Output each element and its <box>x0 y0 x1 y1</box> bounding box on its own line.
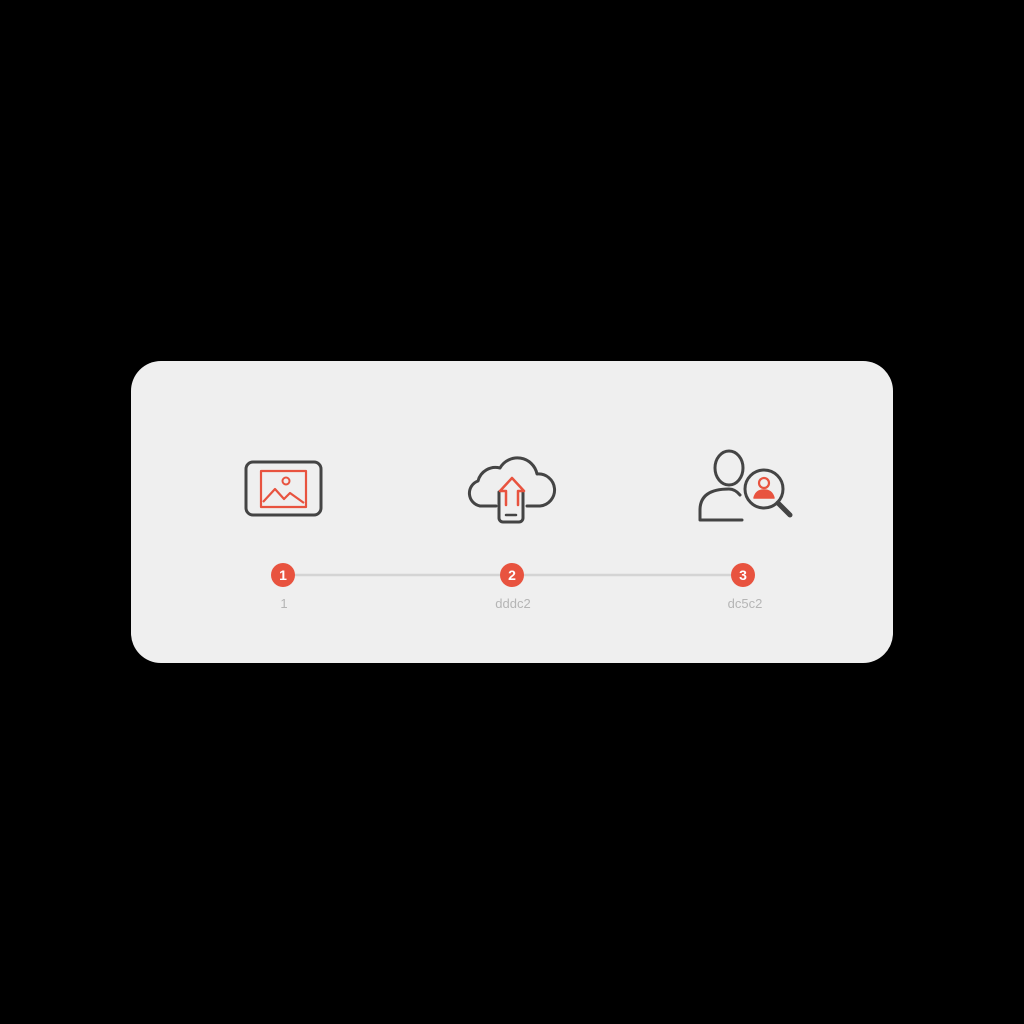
step markers: 3 <box>739 567 747 583</box>
step markers: 2 <box>508 567 516 583</box>
step markers <box>271 563 755 587</box>
step markers: 1 <box>279 567 287 583</box>
icon: user search <box>700 451 790 520</box>
icon: image <box>246 462 321 515</box>
label: step 2: dddc2 <box>495 596 531 611</box>
icon: cloud upload <box>469 458 555 522</box>
label: step 1: 1 <box>280 596 288 611</box>
panel: process card <box>131 361 893 663</box>
connector line <box>283 574 743 576</box>
label: step 3: dc5c2 <box>728 596 762 611</box>
